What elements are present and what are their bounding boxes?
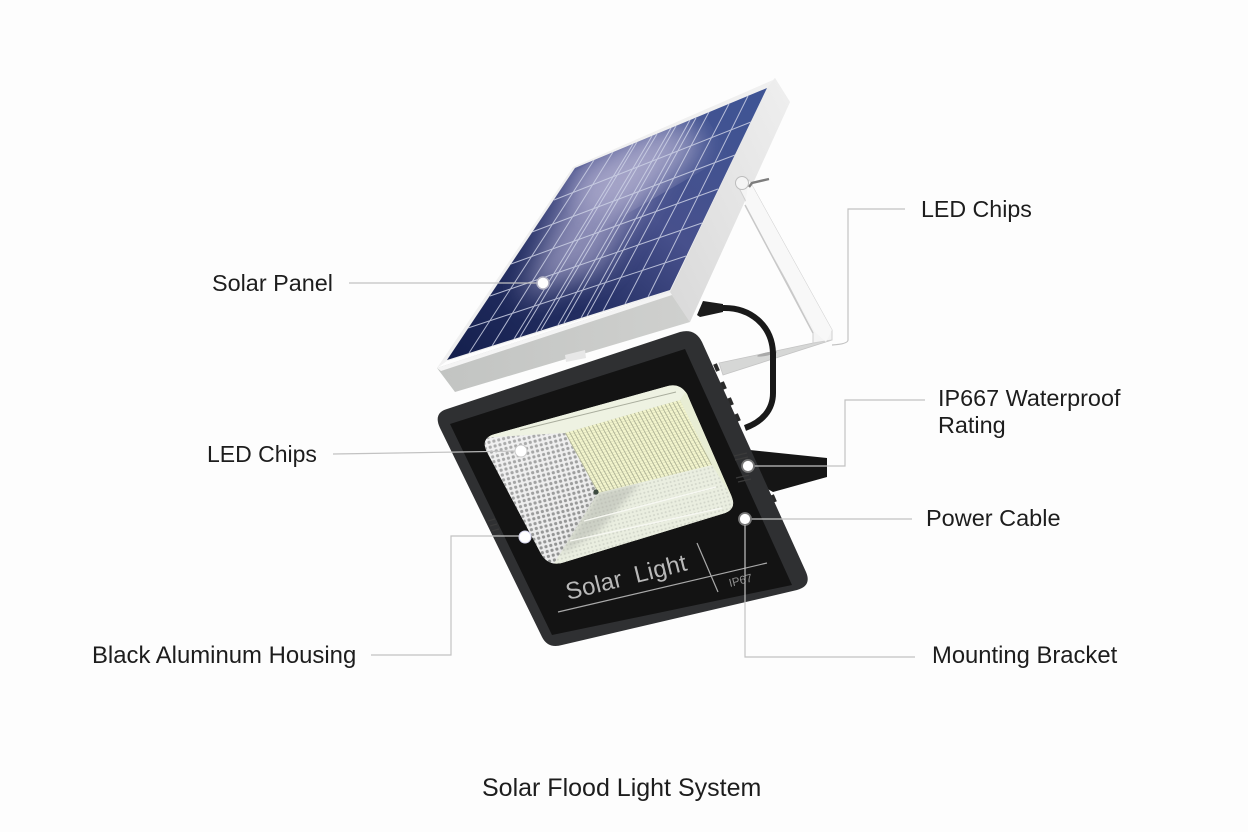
lens xyxy=(484,385,734,564)
housing body xyxy=(438,331,808,646)
leader: Solar Panel xyxy=(349,277,549,289)
label: LED Chips right: LED Chips xyxy=(921,196,1032,222)
label: Solar Panel: Solar Panel xyxy=(212,270,333,296)
label: Power Cable: Power Cable xyxy=(926,505,1061,531)
mounting bracket arm xyxy=(719,176,832,375)
title: Solar Flood Light System xyxy=(482,774,761,802)
rear ribs xyxy=(715,364,775,502)
solar panel xyxy=(437,78,790,392)
printed rating: IP67 xyxy=(728,573,754,590)
LED chip array xyxy=(565,400,712,493)
leader: Power Cable xyxy=(739,513,912,525)
top reflector xyxy=(488,385,690,438)
rear mounting wedge xyxy=(750,450,827,492)
power cable xyxy=(697,301,773,428)
panel glass with cell grid xyxy=(447,88,767,360)
label: Black Aluminum Housing: Black Aluminum Housing xyxy=(92,642,356,669)
bottom reflector xyxy=(554,466,734,564)
black flood light housing xyxy=(438,331,827,646)
label: Mounting Bracket: Mounting Bracket xyxy=(932,642,1118,669)
vents xyxy=(488,453,751,536)
leader: LED Chips left xyxy=(333,445,527,457)
leader: Mounting Bracket xyxy=(745,525,915,657)
printed product name: Solar Light xyxy=(563,550,690,606)
leader: Black Aluminum Housing xyxy=(371,531,531,655)
label: LED Chips left: LED Chips xyxy=(207,441,317,467)
label: IP667 Waterproof Rating: Rating xyxy=(938,412,1006,438)
left dotted reflector xyxy=(484,433,596,564)
right reflector xyxy=(680,392,732,497)
leader: IP667 Waterproof Rating xyxy=(742,400,925,472)
housing inner recess xyxy=(450,349,792,635)
leader: LED Chips right xyxy=(832,209,905,345)
printed divider lines xyxy=(558,543,767,612)
label: IP667 Waterproof Rating: IP667 Waterproof xyxy=(938,385,1120,411)
panel frame xyxy=(437,78,790,392)
